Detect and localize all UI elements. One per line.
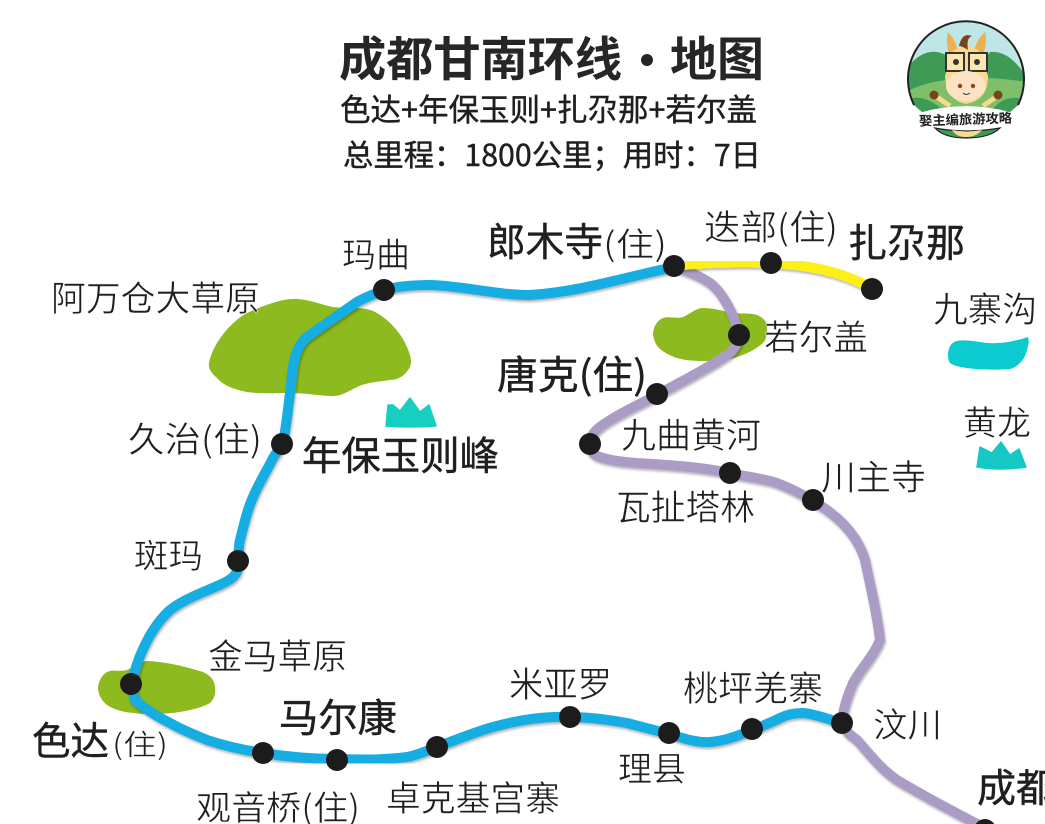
icon: 年保玉则 mountain <box>386 398 436 427</box>
place labels: (住) <box>603 218 667 266</box>
place labels: 桃坪羌寨 <box>683 661 823 712</box>
logo: cartoon horse badge <box>905 20 1027 138</box>
subtitle: destinations: 色达+年保玉则+扎尕那+若尔盖 <box>340 85 757 130</box>
subtitle: distance and time: 总里程：1800公里；用时：7日 <box>343 131 761 175</box>
title: 成都甘南环线 <box>339 21 622 90</box>
logo: cartoon horse badge: 娶主编旅游攻略 <box>919 107 1012 130</box>
place labels: 迭部(住) <box>704 200 838 251</box>
title: 地图 <box>670 21 764 90</box>
place labels: (住) <box>112 722 168 764</box>
place labels: 瓦扯塔林 <box>616 480 755 531</box>
place labels: 阿万仓大草原 <box>51 271 260 322</box>
place labels: 斑玛 <box>134 529 203 578</box>
meadow: 金马草原 <box>98 661 215 714</box>
place labels: 扎尕那 <box>848 213 965 269</box>
lake: 九寨沟 <box>948 337 1029 370</box>
horse head <box>947 32 986 56</box>
place labels: 郎木寺 <box>487 212 603 268</box>
place labels: 金马草原 <box>208 629 347 680</box>
place labels: 若尔盖 <box>764 310 868 361</box>
meadow: 若尔盖 <box>653 308 767 361</box>
place labels: 黄龙 <box>963 396 1031 445</box>
place labels: 色达 <box>32 711 109 767</box>
route: purple section <box>590 267 985 824</box>
place labels: 九寨沟 <box>933 282 1037 333</box>
place labels <box>32 200 1045 824</box>
route: blue upper section <box>132 267 674 684</box>
place labels: 玛曲 <box>342 228 410 277</box>
place labels: 九曲黄河 <box>621 408 761 459</box>
route stops <box>120 252 996 824</box>
route: yellow section <box>674 262 872 289</box>
place labels: 理县 <box>618 742 686 791</box>
place labels: 久治(住) <box>128 412 262 463</box>
route: blue lower section <box>132 684 842 760</box>
place labels: 川主寺 <box>821 450 926 501</box>
meadow: 阿万仓大草原 <box>209 299 411 396</box>
title <box>339 21 764 90</box>
place labels: 马尔康 <box>279 688 397 744</box>
place labels: 卓克基宫寨 <box>386 771 560 822</box>
place labels: 汶川 <box>873 698 942 747</box>
place labels: 唐克(住) <box>497 345 647 401</box>
place labels: 年保玉则峰 <box>302 425 499 482</box>
place labels: 米亚罗 <box>509 657 612 708</box>
icon: 黄龙 mountain <box>977 442 1026 469</box>
